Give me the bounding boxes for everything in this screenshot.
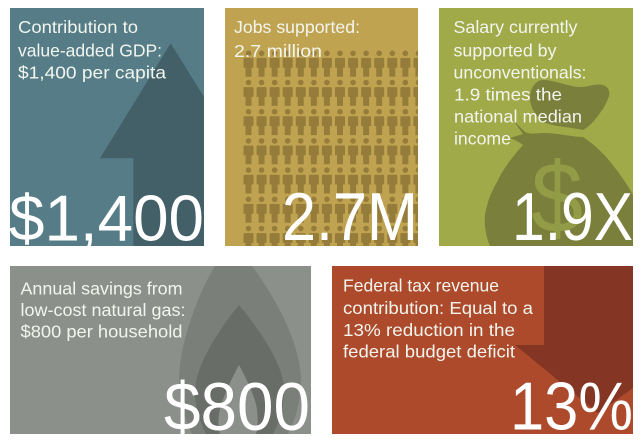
text: savings description: low-cost natural gas: bbox=[20, 300, 186, 320]
panel: federal tax revenue bbox=[332, 266, 633, 440]
text: savings description: Annual savings from bbox=[20, 278, 182, 298]
text: jobs description: Jobs supported: bbox=[234, 17, 360, 37]
panel: GDP contribution bbox=[9, 8, 204, 254]
text: tax description: Federal tax revenue bbox=[343, 276, 499, 296]
text: tax description bbox=[343, 276, 533, 361]
text: savings description: $800 per household bbox=[20, 322, 183, 342]
text: GDP description bbox=[18, 17, 166, 82]
text: GDP description: value-added GDP: bbox=[18, 40, 162, 60]
icon: money bag: $ bbox=[531, 142, 583, 254]
icon: pie wedge bbox=[515, 266, 633, 413]
icon: money bag bbox=[485, 80, 633, 254]
text: savings description bbox=[20, 278, 186, 342]
text: tax description: federal budget deficit bbox=[343, 341, 515, 361]
big number: 2.7M: 2.7M bbox=[282, 179, 418, 255]
text: GDP description: $1,400 per capita bbox=[18, 62, 166, 82]
text: salary description: supported by bbox=[454, 40, 557, 60]
text: salary description: national median bbox=[454, 107, 582, 127]
text: jobs description: 2.7 million bbox=[234, 41, 322, 61]
icon: up arrow bbox=[100, 43, 204, 246]
text: tax description: 13% reduction in the bbox=[343, 320, 515, 340]
icon: grid of people bbox=[244, 50, 423, 252]
text: jobs description bbox=[234, 20, 358, 57]
panel: salary bbox=[439, 8, 633, 255]
icon: flame bbox=[179, 266, 301, 434]
panel: jobs supported bbox=[225, 8, 423, 255]
text: salary description bbox=[454, 17, 586, 148]
text: salary description: 1.9 times the bbox=[454, 84, 562, 104]
text: GDP description: Contribution to bbox=[18, 17, 138, 37]
panel: natural gas savings bbox=[10, 266, 311, 440]
text: salary description: unconventionals: bbox=[454, 62, 586, 82]
text: salary description: Salary currently bbox=[454, 17, 578, 37]
text: tax description: contribution: Equal to a bbox=[343, 298, 533, 318]
big number: $1,400: $1,400 bbox=[9, 182, 204, 254]
text: salary description: income bbox=[454, 128, 511, 148]
